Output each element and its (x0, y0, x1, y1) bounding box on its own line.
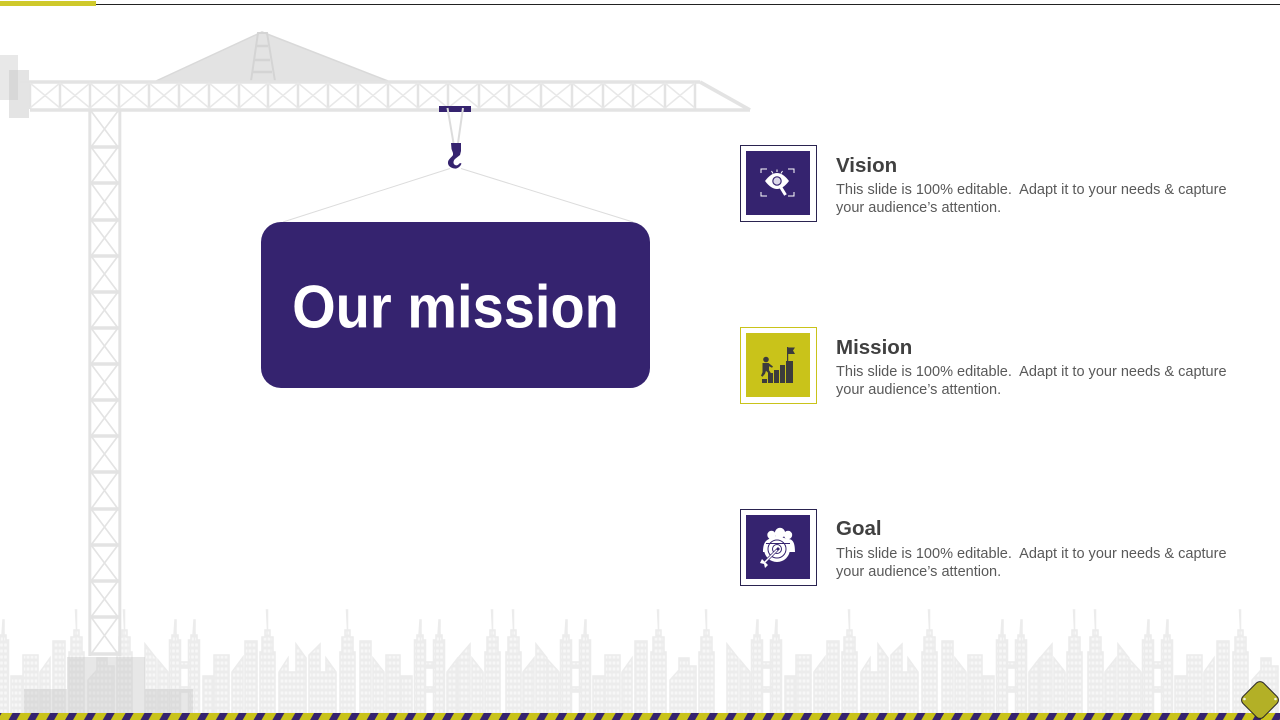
top accent rule (0, 1, 1280, 6)
crane apex (156, 32, 388, 81)
sign title: Our mission (292, 272, 619, 340)
icon tile: vision (740, 146, 816, 222)
text block: vision (836, 154, 1227, 216)
crane mast (90, 110, 120, 656)
icon: team and target (760, 528, 795, 568)
sign panel (261, 222, 650, 388)
text block: mission: your audience’s attention. (836, 382, 1001, 398)
text block: mission (836, 336, 1227, 398)
text block: goal (836, 517, 1227, 580)
crane jib (20, 82, 750, 110)
crane hook (439, 106, 471, 169)
crane counterweights (0, 55, 29, 118)
icon: eye with magnifier (761, 169, 794, 196)
icon: climber on stairs with flag (761, 347, 795, 383)
hazard tape (0, 713, 1280, 720)
text block: mission: This slide is 100% editable. Adapt it to your needs & capture (836, 364, 1227, 380)
text block: goal: Goal (836, 517, 882, 540)
sign hanging cables (283, 168, 633, 222)
road sign badge (1239, 679, 1280, 720)
city skyline (0, 610, 1280, 720)
crane base (24, 657, 193, 713)
text block: goal: your audience’s attention. (836, 564, 1001, 580)
tower crane (0, 32, 750, 713)
text block: goal: This slide is 100% editable. Adapt it to your needs & capture (836, 546, 1227, 562)
text block: mission: Mission (836, 336, 912, 359)
icon tile: goal (740, 510, 816, 586)
icon tile: mission (740, 328, 816, 404)
text block: vision: your audience’s attention. (836, 200, 1001, 216)
text block: vision: This slide is 100% editable. Adapt it to your needs & capture (836, 182, 1227, 198)
text block: vision: Vision (836, 154, 897, 177)
